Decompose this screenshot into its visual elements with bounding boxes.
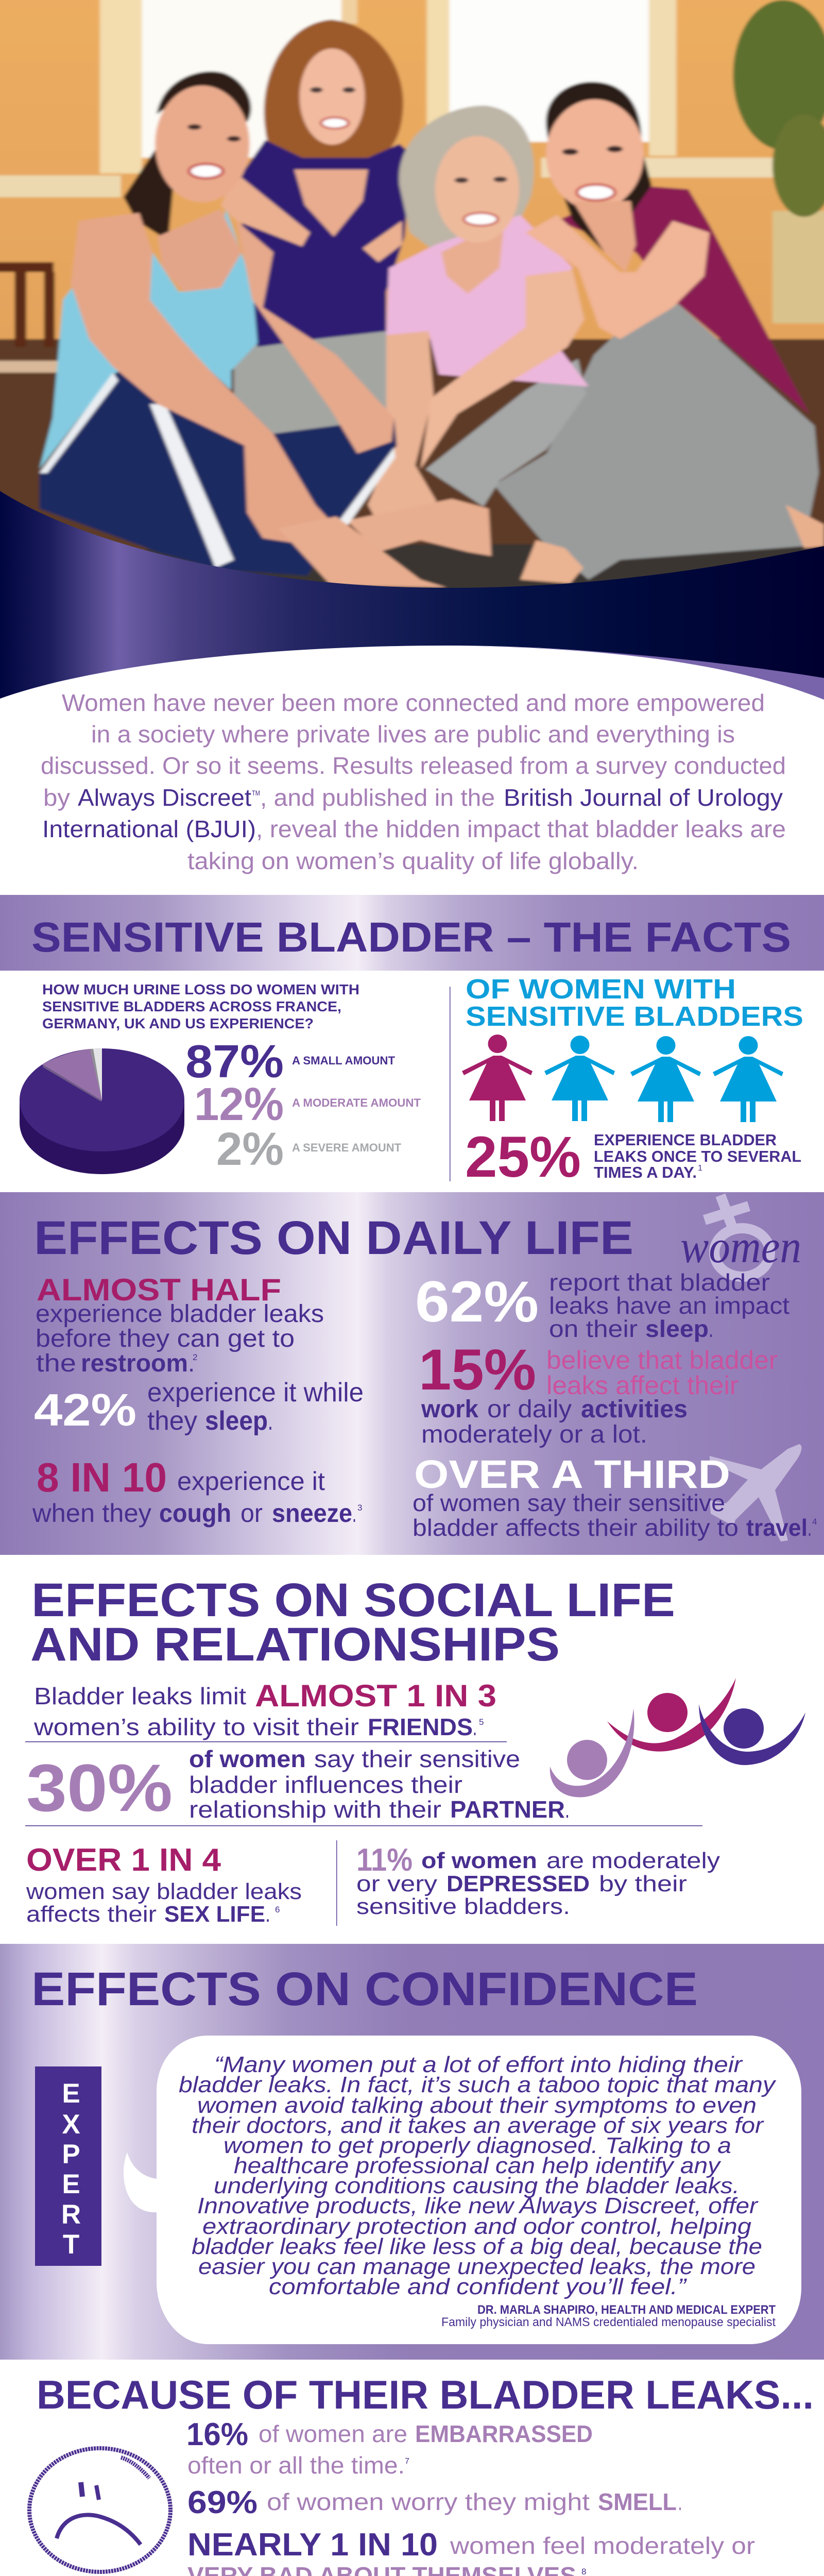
panel: effects on confidence (0, 1944, 824, 2360)
stat: 15 percent: activities (581, 1396, 688, 1423)
stat: 8 in 10: experience it (177, 1467, 325, 1496)
stat: over a third (413, 1452, 817, 1541)
legend: small amount: 87% (185, 1036, 284, 1088)
stat: almost half: restroom (81, 1350, 188, 1377)
legend: moderate amount: 12% (194, 1079, 284, 1130)
intro paragraph: discussed. Or so it seems. Results released from a survey conducted (41, 752, 786, 779)
stat: over 1 in 4: 6 (275, 1905, 280, 1914)
stat: over a third: of women say their sensitive (413, 1489, 725, 1516)
stat: 11 percent: of women (421, 1848, 537, 1873)
expert tag (35, 2066, 101, 2266)
stat: 25 percent: 1 (698, 1164, 702, 1173)
subheading: SENSITIVE BLADDERS (466, 1001, 803, 1032)
stat: 16 percent embarrassed: EMBARRASSED (415, 2420, 593, 2447)
intro paragraph (41, 689, 786, 874)
expert quote: bladder leaks. In fact, it’s such a taboo topic that many (179, 2072, 777, 2097)
expert quote: women avoid talking about their symptoms to even (197, 2093, 757, 2118)
stat: nearly 1 in 10: NEARLY 1 IN 10 (187, 2527, 438, 2563)
expert tag: R (61, 2199, 81, 2230)
legend: severe amount: A SEVERE AMOUNT (292, 1141, 402, 1154)
stat: 11 percent: 11% (356, 1842, 413, 1878)
stat: 25 percent: LEAKS ONCE TO SEVERAL (594, 1147, 801, 1165)
expert quote: underlying conditions causing the bladder leaks. (214, 2173, 740, 2198)
question text: GERMANY, UK AND US EXPERIENCE? (42, 1015, 314, 1031)
stat: 8 in 10 (32, 1454, 362, 1528)
stat: 8 in 10: cough (159, 1499, 231, 1528)
panel: urine loss pie (20, 981, 421, 1175)
stat: over a third: travel (746, 1514, 808, 1541)
stat: 69 percent smell: of women worry they might (267, 2488, 590, 2515)
stat: 15 percent: work (421, 1396, 478, 1423)
stat: almost half: ALMOST HALF (37, 1273, 281, 1307)
intro paragraph: in a society where private lives are public and everything is (91, 721, 735, 748)
stat: 42 percent: experience it while (147, 1378, 364, 1408)
stat: 25 percent: EXPERIENCE BLADDER (594, 1131, 777, 1149)
expert quote: extraordinary protection and odor control, helping (202, 2214, 752, 2239)
stat: almost 1 in 3: ALMOST 1 IN 3 (255, 1679, 496, 1713)
heading (30, 1574, 675, 1671)
stat: over a third: OVER A THIRD (414, 1452, 730, 1497)
stat: 30 percent partner: PARTNER (450, 1796, 565, 1823)
expert quote: “Many women put a lot of effort into hiding their (214, 2052, 744, 2077)
stat: almost half: . (188, 1350, 195, 1377)
hero photo: four smiling women sitting together (0, 0, 824, 647)
expert quote: Innovative products, like new Always Discreet, offer (197, 2193, 759, 2218)
stat: almost half: 2 (193, 1352, 197, 1362)
stat: 62 percent: on their (549, 1315, 638, 1342)
stat: 42 percent (34, 1378, 364, 1436)
attribution: DR. MARLA SHAPIRO, HEALTH AND MEDICAL EXPERT (477, 2303, 776, 2317)
expert quote: bladder leaks feel like less of a big deal, because the (192, 2234, 762, 2259)
intro paragraph: TM (252, 789, 260, 797)
intro paragraph: British Journal of Urology (504, 784, 783, 811)
stat: 11 percent: sensitive bladders. (356, 1894, 570, 1919)
expert quote: their doctors, and it takes an average of six years for (192, 2113, 765, 2138)
intro paragraph: Always Discreet (78, 784, 251, 811)
intro paragraph: , and published in the (260, 784, 495, 811)
stat: 30 percent partner: say their sensitive (314, 1745, 520, 1772)
stat: 30 percent partner: of women (189, 1745, 306, 1772)
stat: 15 percent: or daily (487, 1396, 572, 1423)
stat: 62 percent: . (709, 1315, 713, 1342)
stat: almost half: the (36, 1350, 76, 1377)
expert tag: P (62, 2139, 80, 2170)
stat: nearly 1 in 10: women feel moderately or (450, 2532, 755, 2559)
stat: 69 percent smell: SMELL (598, 2488, 677, 2515)
heading: SENSITIVE BLADDER – THE FACTS (31, 914, 791, 961)
stat: 30 percent partner: bladder influences their (189, 1771, 462, 1798)
stat: 42 percent: they (147, 1406, 197, 1436)
stat: 69 percent smell: . (678, 2488, 682, 2515)
stat: almost half: experience bladder leaks (36, 1300, 324, 1328)
speech bubble (124, 2036, 801, 2344)
stat: 16 percent embarrassed: of women are (259, 2420, 407, 2447)
legend: small amount: A SMALL AMOUNT (292, 1054, 396, 1067)
stat: 16 percent embarrassed: often or all the time. (187, 2452, 405, 2479)
heading: BECAUSE OF THEIR BLADDER LEAKS... (37, 2372, 814, 2417)
stat: almost 1 in 3 (33, 1679, 496, 1740)
stat: almost half: before they can get to (36, 1325, 295, 1352)
heading: AND RELATIONSHIPS (30, 1618, 560, 1671)
expert tag: E (62, 2169, 80, 2199)
icon: woman figure (630, 1036, 701, 1122)
stat: over 1 in 4: women say bladder leaks (26, 1879, 302, 1904)
stat: 8 in 10: 8 IN 10 (37, 1454, 167, 1500)
stat: 8 in 10: sneeze (272, 1499, 352, 1528)
stat: over 1 in 4: OVER 1 IN 4 (26, 1842, 221, 1878)
heading: EFFECTS ON DAILY LIFE (34, 1212, 633, 1264)
stat: 42 percent: . (268, 1406, 273, 1436)
stat: 15 percent: moderately or a lot. (421, 1421, 647, 1448)
stat: 11 percent: by their (599, 1871, 687, 1896)
stat: 69 percent smell (187, 2485, 682, 2520)
intro paragraph: taking on women’s quality of life globally. (187, 848, 639, 874)
icon: woman figure highlighted (462, 1035, 533, 1121)
script word women: women (680, 1222, 801, 1273)
stat: 16 percent embarrassed: 16% (186, 2417, 248, 2452)
expert quote (179, 2052, 777, 2299)
stat: over 1 in 4: . (265, 1902, 270, 1927)
stat: 11 percent (356, 1842, 720, 1919)
expert tag: T (63, 2229, 79, 2260)
stat: over 1 in 4: affects their (26, 1902, 157, 1927)
expert quote: comfortable and confident you’ll feel.” (269, 2274, 688, 2299)
stat: 42 percent: sleep (205, 1406, 268, 1436)
stat: 8 in 10: when they (32, 1499, 151, 1528)
stat: 30 percent partner (26, 1745, 570, 1825)
stat: almost 1 in 3: FRIENDS (368, 1714, 473, 1740)
panel: effects on social life (25, 1574, 805, 1927)
panel: one in four women (462, 974, 803, 1189)
hero swoosh (0, 491, 824, 700)
stat: 30 percent partner: 30% (26, 1750, 173, 1825)
subheading (466, 974, 803, 1032)
expert quote: women to get properly diagnosed. Talking to a (224, 2133, 731, 2158)
stat: 8 in 10: or (241, 1499, 263, 1528)
stat: over a third: bladder affects their ability to (413, 1514, 739, 1541)
stat: 62 percent: sleep (645, 1315, 709, 1342)
stat: 15 percent: leaks affect their (546, 1371, 739, 1400)
panel: effects on daily life (0, 1192, 824, 1555)
stat: almost 1 in 3: Bladder leaks limit (34, 1683, 246, 1709)
stat: over a third: 4 (812, 1517, 817, 1527)
expert tag: E (62, 2078, 80, 2109)
stat: 15 percent (419, 1337, 778, 1448)
stat: almost half (36, 1273, 324, 1377)
stat: 15 percent: believe that bladder (546, 1346, 778, 1375)
icon: three people swooshes (550, 1678, 805, 1797)
legend: severe amount (216, 1124, 402, 1175)
intro paragraph: International (BJUI) (42, 816, 256, 842)
stat: 62 percent: report that bladder (549, 1269, 770, 1296)
stat: 62 percent: 62% (415, 1269, 539, 1334)
stat: 11 percent: DEPRESSED (447, 1871, 590, 1896)
subheading: OF WOMEN WITH (466, 974, 736, 1005)
question text (42, 981, 359, 1031)
heading: EFFECTS ON SOCIAL LIFE (31, 1574, 675, 1626)
stat: over 1 in 4 (26, 1842, 302, 1927)
stat: 25 percent: 25% (465, 1125, 581, 1189)
icon: airplane (710, 1444, 801, 1541)
expert quote: healthcare professional can help identify any (234, 2153, 722, 2178)
stat: 15 percent: 15% (419, 1337, 536, 1402)
stat: almost 1 in 3: . (473, 1714, 477, 1740)
attribution: Family physician and NAMS credentialed menopause specialist (441, 2315, 776, 2329)
question text: HOW MUCH URINE LOSS DO WOMEN WITH (42, 981, 359, 997)
stat: 11 percent: or very (356, 1871, 437, 1896)
intro paragraph: Women have never been more connected and more empowered (62, 689, 765, 716)
stat: 62 percent (415, 1269, 789, 1342)
stat: 8 in 10: . (352, 1499, 356, 1528)
panel: because of their bladder leaks (29, 2372, 814, 2576)
stat: 16 percent embarrassed (186, 2417, 593, 2479)
stat: 30 percent partner: . (565, 1796, 570, 1823)
icon: woman figure (544, 1036, 615, 1121)
icon: sad face (29, 2448, 170, 2572)
stat: 11 percent: are moderately (546, 1848, 720, 1873)
stat: 8 in 10: 3 (357, 1503, 362, 1513)
stat: 62 percent: leaks have an impact (549, 1292, 789, 1319)
stat: almost 1 in 3: 5 (479, 1717, 484, 1727)
expert quote: easier you can manage unexpected leaks, the more (198, 2254, 756, 2279)
stat: 25 percent: TIMES A DAY. (594, 1163, 697, 1181)
legend: moderate amount (194, 1079, 421, 1130)
icon: female symbol (705, 1195, 770, 1277)
stat: 25 percent (465, 1125, 801, 1189)
pie chart (20, 1048, 184, 1174)
stat: 69 percent smell: 69% (187, 2485, 258, 2520)
legend: small amount (185, 1036, 396, 1088)
stat: 16 percent embarrassed: 7 (405, 2457, 409, 2466)
stat: over a third: . (808, 1514, 812, 1541)
icon: woman figure (713, 1036, 783, 1122)
intro paragraph: , reveal the hidden impact that bladder leaks are (256, 816, 786, 842)
panel: sensitive bladder heading band (0, 895, 824, 971)
stat: nearly 1 in 10 (187, 2527, 755, 2576)
legend: moderate amount: A MODERATE AMOUNT (292, 1096, 421, 1109)
attribution (441, 2303, 776, 2329)
intro paragraph: by (43, 784, 70, 811)
stat: 30 percent partner: relationship with their (189, 1796, 441, 1823)
stat: over 1 in 4: SEX LIFE (164, 1902, 265, 1927)
stat: 42 percent: 42% (34, 1384, 136, 1435)
question text: SENSITIVE BLADDERS ACROSS FRANCE, (42, 998, 341, 1014)
legend: severe amount: 2% (216, 1124, 284, 1175)
stat: almost 1 in 3: women’s ability to visit their (33, 1714, 359, 1740)
heading: EFFECTS ON CONFIDENCE (31, 1963, 698, 2015)
expert tag: X (62, 2109, 80, 2140)
